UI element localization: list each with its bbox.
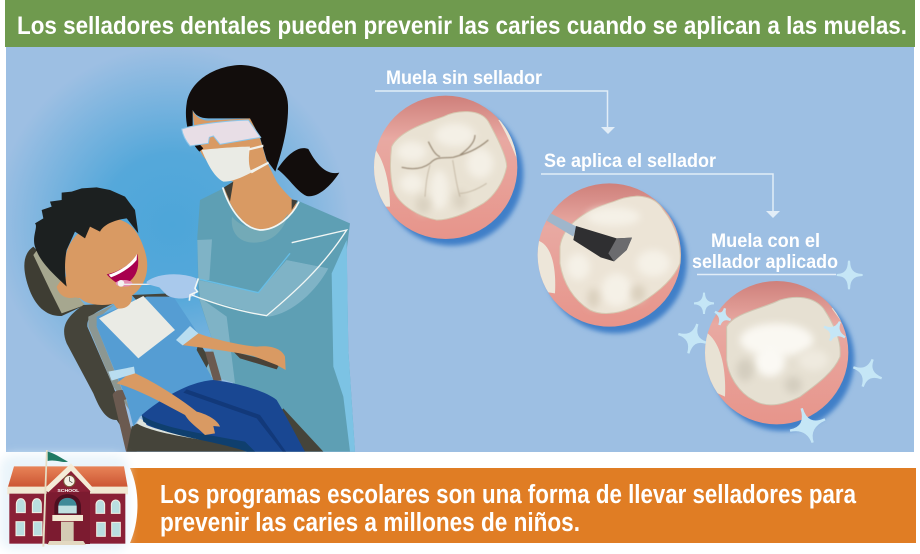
child face [65,218,147,305]
tooth circle: with sealant [700,280,854,431]
icon: school building [0,450,128,550]
clock [64,475,75,487]
dentist goggles [182,120,261,146]
child bib [99,296,175,358]
child sleeve near [108,367,135,381]
child arm near [117,372,220,435]
bottom banner: prevenir las caries a millones de niños. [160,509,580,537]
roof [7,466,128,489]
icon: school building: SCHOOL [57,488,80,493]
dentist hair [186,65,288,172]
pediment [44,463,95,492]
header banner [5,0,915,47]
dentist mask [202,145,269,182]
step label: Se aplica el sellador: Se aplica el sellador [544,151,717,172]
dentist sleeve [189,228,348,317]
arrow: to step 2 [375,91,615,134]
tooth circle: without sealant [367,95,527,246]
sparkles [678,262,882,443]
entrance [52,515,83,521]
dentist neck and face [192,110,297,229]
illustration: child in dental chair with dentist [24,65,355,452]
arched window [54,494,81,514]
arrow: to step 3 [541,174,780,218]
step label: Muela sin sellador: Muela sin sellador [386,68,543,89]
step label: Muela con el sellador aplicado [692,231,838,274]
windows [16,499,120,536]
bottom banner [130,468,916,543]
flagpole and flag [42,450,68,547]
sealant brush [547,213,632,261]
dentist glove [147,274,197,299]
child sleeve far [176,326,198,345]
child arm far [182,333,286,370]
child mouth [107,254,138,284]
child shirt [97,297,213,427]
panel: blue illustration background [0,47,914,452]
tooth circle: sealant being applied [533,183,687,333]
child trousers [142,380,305,452]
dental chair [24,247,323,452]
dental mirror [118,280,150,287]
step label: Muela con el sellador aplicado: sellador aplicado [692,252,838,273]
walls [9,494,125,544]
dentist ponytail [277,148,339,196]
step label: Muela con el sellador aplicado: Muela con el [711,231,820,252]
child hair [34,187,138,287]
child neck and ear [57,277,132,309]
dentist gown [197,188,355,452]
